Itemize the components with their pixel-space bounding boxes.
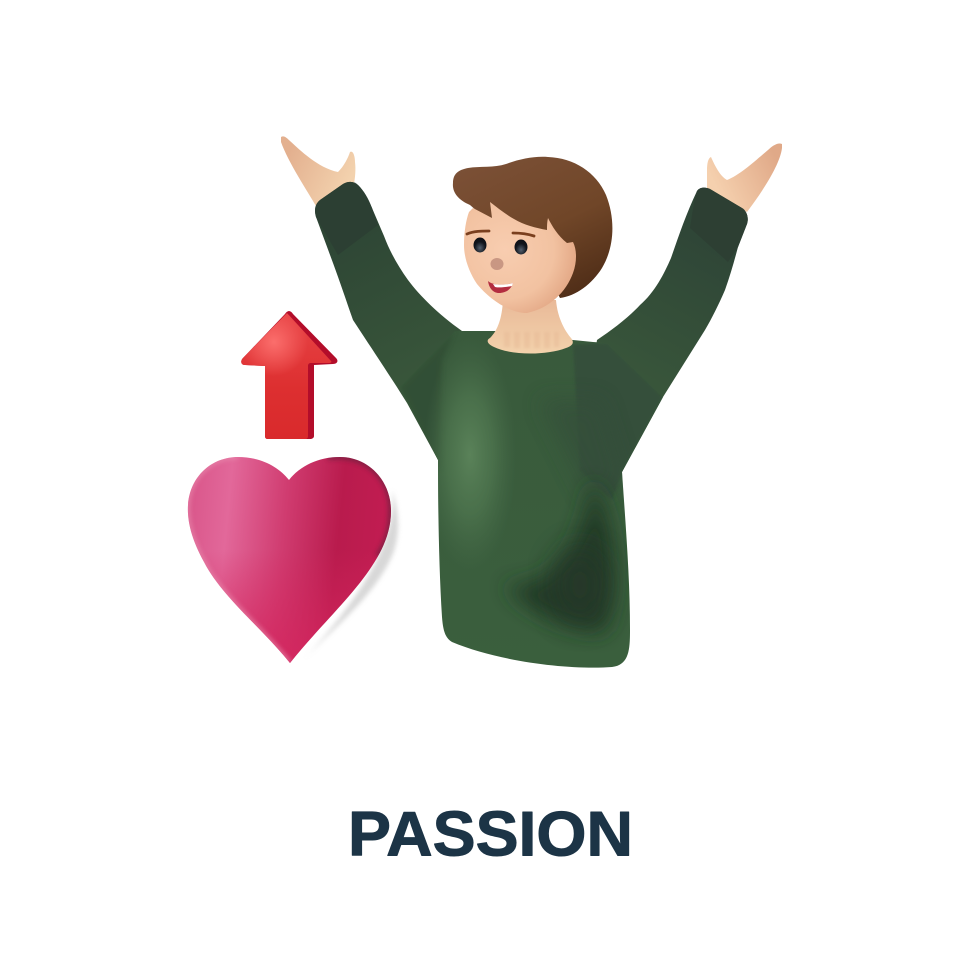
mouth — [488, 281, 513, 293]
right side shade — [573, 343, 663, 500]
nose — [490, 258, 504, 270]
left sleeve — [315, 182, 470, 460]
hair — [453, 157, 612, 298]
left underarm shade — [402, 341, 448, 460]
heart icon — [185, 455, 398, 668]
eyebrows — [467, 231, 534, 236]
left hand — [281, 136, 355, 206]
left cuff — [315, 182, 378, 255]
eyes — [474, 238, 528, 254]
right hand — [707, 143, 782, 212]
person — [281, 136, 782, 668]
face — [464, 202, 576, 313]
right sleeve — [585, 188, 748, 472]
chest highlight — [432, 366, 504, 542]
neck collar — [488, 300, 573, 354]
infographic — [188, 136, 782, 856]
arrow up icon — [241, 311, 337, 439]
sweater body — [431, 331, 663, 668]
lower dark fold — [505, 480, 614, 632]
right cuff — [690, 188, 748, 262]
title: PASSION — [348, 800, 633, 870]
